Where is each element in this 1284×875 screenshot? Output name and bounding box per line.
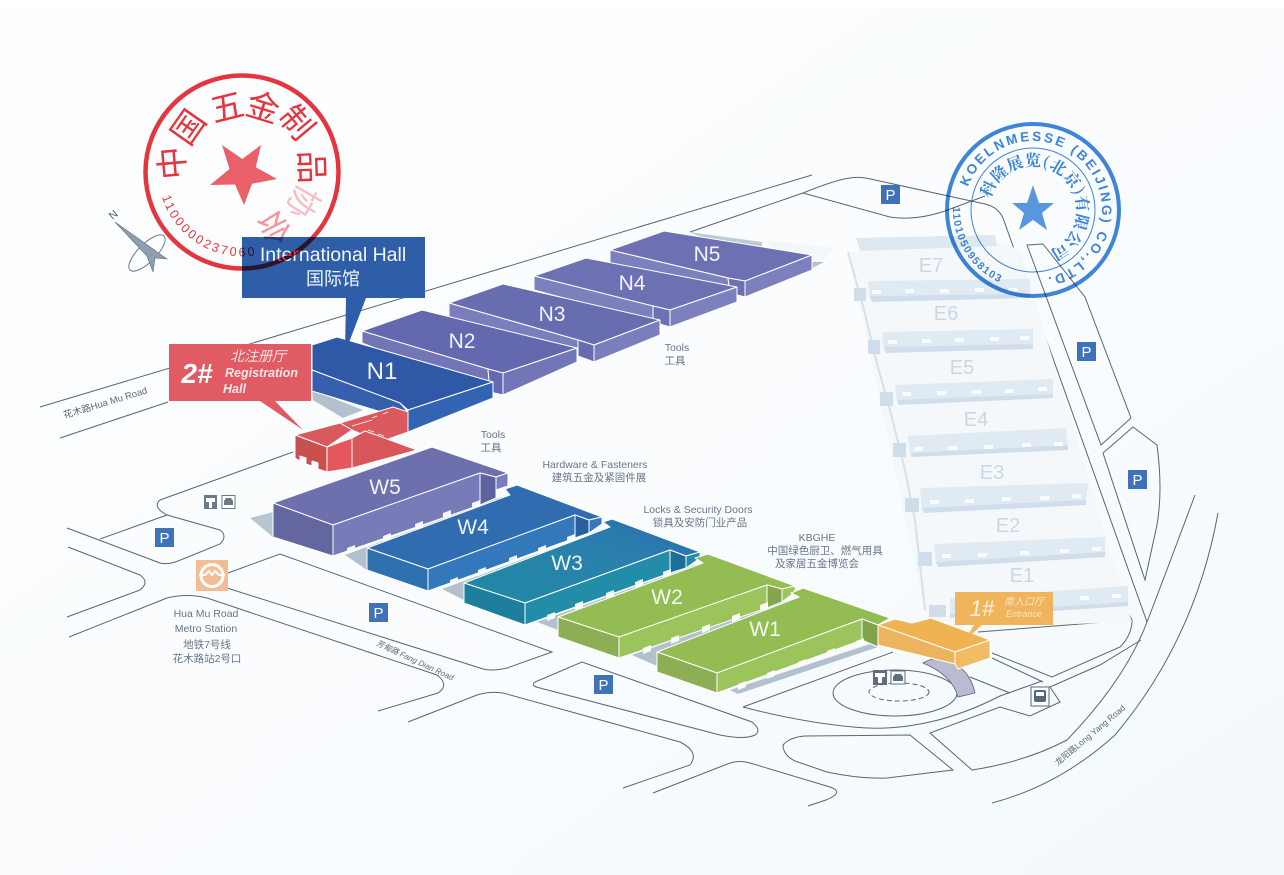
callout: 1# Entrance: Entrance [1006,609,1042,619]
label: Tools west [480,429,505,454]
label: KBGHE: KBGHE [799,532,835,544]
hall W5: W5 [369,476,401,499]
hall W3: W3 [551,552,583,575]
callout: 1# Entrance: 南入口厅 [1004,596,1046,608]
hall W4: W4 [457,516,489,539]
hall W1: W1 [749,618,781,641]
hall W3 [464,519,700,625]
panel: east halls (pale): E2 [996,515,1020,537]
callout: 2# Registration Hall: Registration [225,366,298,380]
panel: east halls (pale): E1 [1010,565,1034,587]
hall W4 [367,485,602,591]
panel: east halls (pale): E4 [964,409,988,431]
icon: metro [196,560,228,591]
label: Locks and Security Doors: Locks & Security Doors [643,504,753,516]
hall W2: W2 [651,586,683,609]
stamp: red: 金 [242,85,284,130]
parking markers: P [159,530,170,547]
hall N3 [449,284,660,362]
label: metro station: 花木路站2号口 [173,652,241,665]
callout: 2# Registration Hall: Hall [223,382,246,396]
label: Tools north: 工具 [664,355,686,367]
callout: International Hall: 国际馆 [306,269,360,289]
label: KBGHE [767,532,883,570]
road name: Hua Mu Road: 花木路Hua Mu Road [62,384,149,421]
icon: shuttle bus [1031,687,1049,706]
parking markers [155,185,1147,694]
stamp: red: 1100000237060 [162,196,254,256]
callout: 1# Entrance: 1# [970,596,995,621]
parking markers: P [598,677,609,694]
label: metro station: Hua Mu Road [174,608,239,620]
hall N4: N4 [619,272,646,295]
hall W5 [273,447,508,556]
label: Locks and Security Doors [643,504,753,529]
callout: 2# Registration Hall [169,344,311,430]
stamp: red: 五 [207,86,248,129]
label: metro station [173,608,241,665]
icon: bus and car plaza [873,670,905,685]
callout: 1# Entrance [955,592,1053,640]
stamp: red: 品 [292,150,331,184]
stamp: blue: KOELNMESSE (BEIJING) CO.,LTD. [960,132,1112,284]
label: Tools north: Tools [665,342,689,354]
parking markers: P [373,605,384,622]
icon: bus and car west [204,495,235,509]
panel: east halls (pale): E3 [980,462,1004,484]
label: Tools west: Tools [481,429,505,441]
stamp: red [143,73,341,271]
panel: east halls (pale): E7 [919,255,943,277]
callout: 2# Registration Hall: 北注册厅 [230,348,289,364]
parking markers: P [1132,472,1143,489]
stamp: red: 中 [153,145,192,181]
callout: 2# Registration Hall: 2# [180,358,213,389]
callout: International Hall: International Hall [260,244,406,266]
label: Hardware and Fasteners: 建筑五金及紧固件展 [552,471,647,484]
label: Tools north [664,342,689,367]
entrance building 1# [878,618,990,669]
stamp: red: 协 [278,178,327,225]
panel: east halls (pale): E5 [950,357,974,379]
hall W1 [657,588,890,693]
ground shadows [250,232,878,694]
hall N2: N2 [449,330,475,353]
stamp: blue: 科隆展览(北京)有限公司 [980,152,1090,261]
parking markers: P [1081,344,1092,361]
hall N2 [362,310,577,395]
icon: north compass [107,208,170,276]
registration hall building [295,407,417,472]
roads and road network [40,175,1218,806]
panel: east halls (pale) [765,235,1132,628]
hall N3: N3 [539,303,565,326]
label: Locks and Security Doors: 锁具及安防门业产品 [653,516,747,529]
label: Tools west: 工具 [480,442,502,454]
label: Hardware and Fasteners: Hardware & Fasteners [542,459,648,471]
stamp: red: 制 [272,98,321,147]
entrance arch [923,658,975,697]
hall N5 [610,231,812,297]
stamp: blue: 1101050958103 [952,208,1002,282]
hall N1 [312,337,493,432]
label: KBGHE: 及家居五金博览会 [775,557,859,570]
label: metro station: Metro Station [175,623,237,635]
stamp: red: 会 [252,204,298,252]
label: Hardware and Fasteners [542,459,648,484]
hall N1: N1 [367,358,397,385]
icon: north compass: N [107,208,121,222]
label: metro station: 地铁7号线 [183,638,231,651]
road name: Long Yang Road: 龙阳路Long Yang Road [1053,703,1127,767]
parking markers: P [885,187,896,204]
hall N4 [534,258,737,327]
hall W2 [558,554,795,658]
stamp: red: 国 [164,103,213,151]
label: KBGHE: 中国绿色厨卫、燃气用具 [767,544,883,557]
callout: International Hall [242,237,425,353]
panel: east halls (pale): E6 [934,303,958,325]
hall N5: N5 [694,243,720,266]
road name: Fang Dian Road: 芳甸路 Fang Dian Road [375,639,455,683]
